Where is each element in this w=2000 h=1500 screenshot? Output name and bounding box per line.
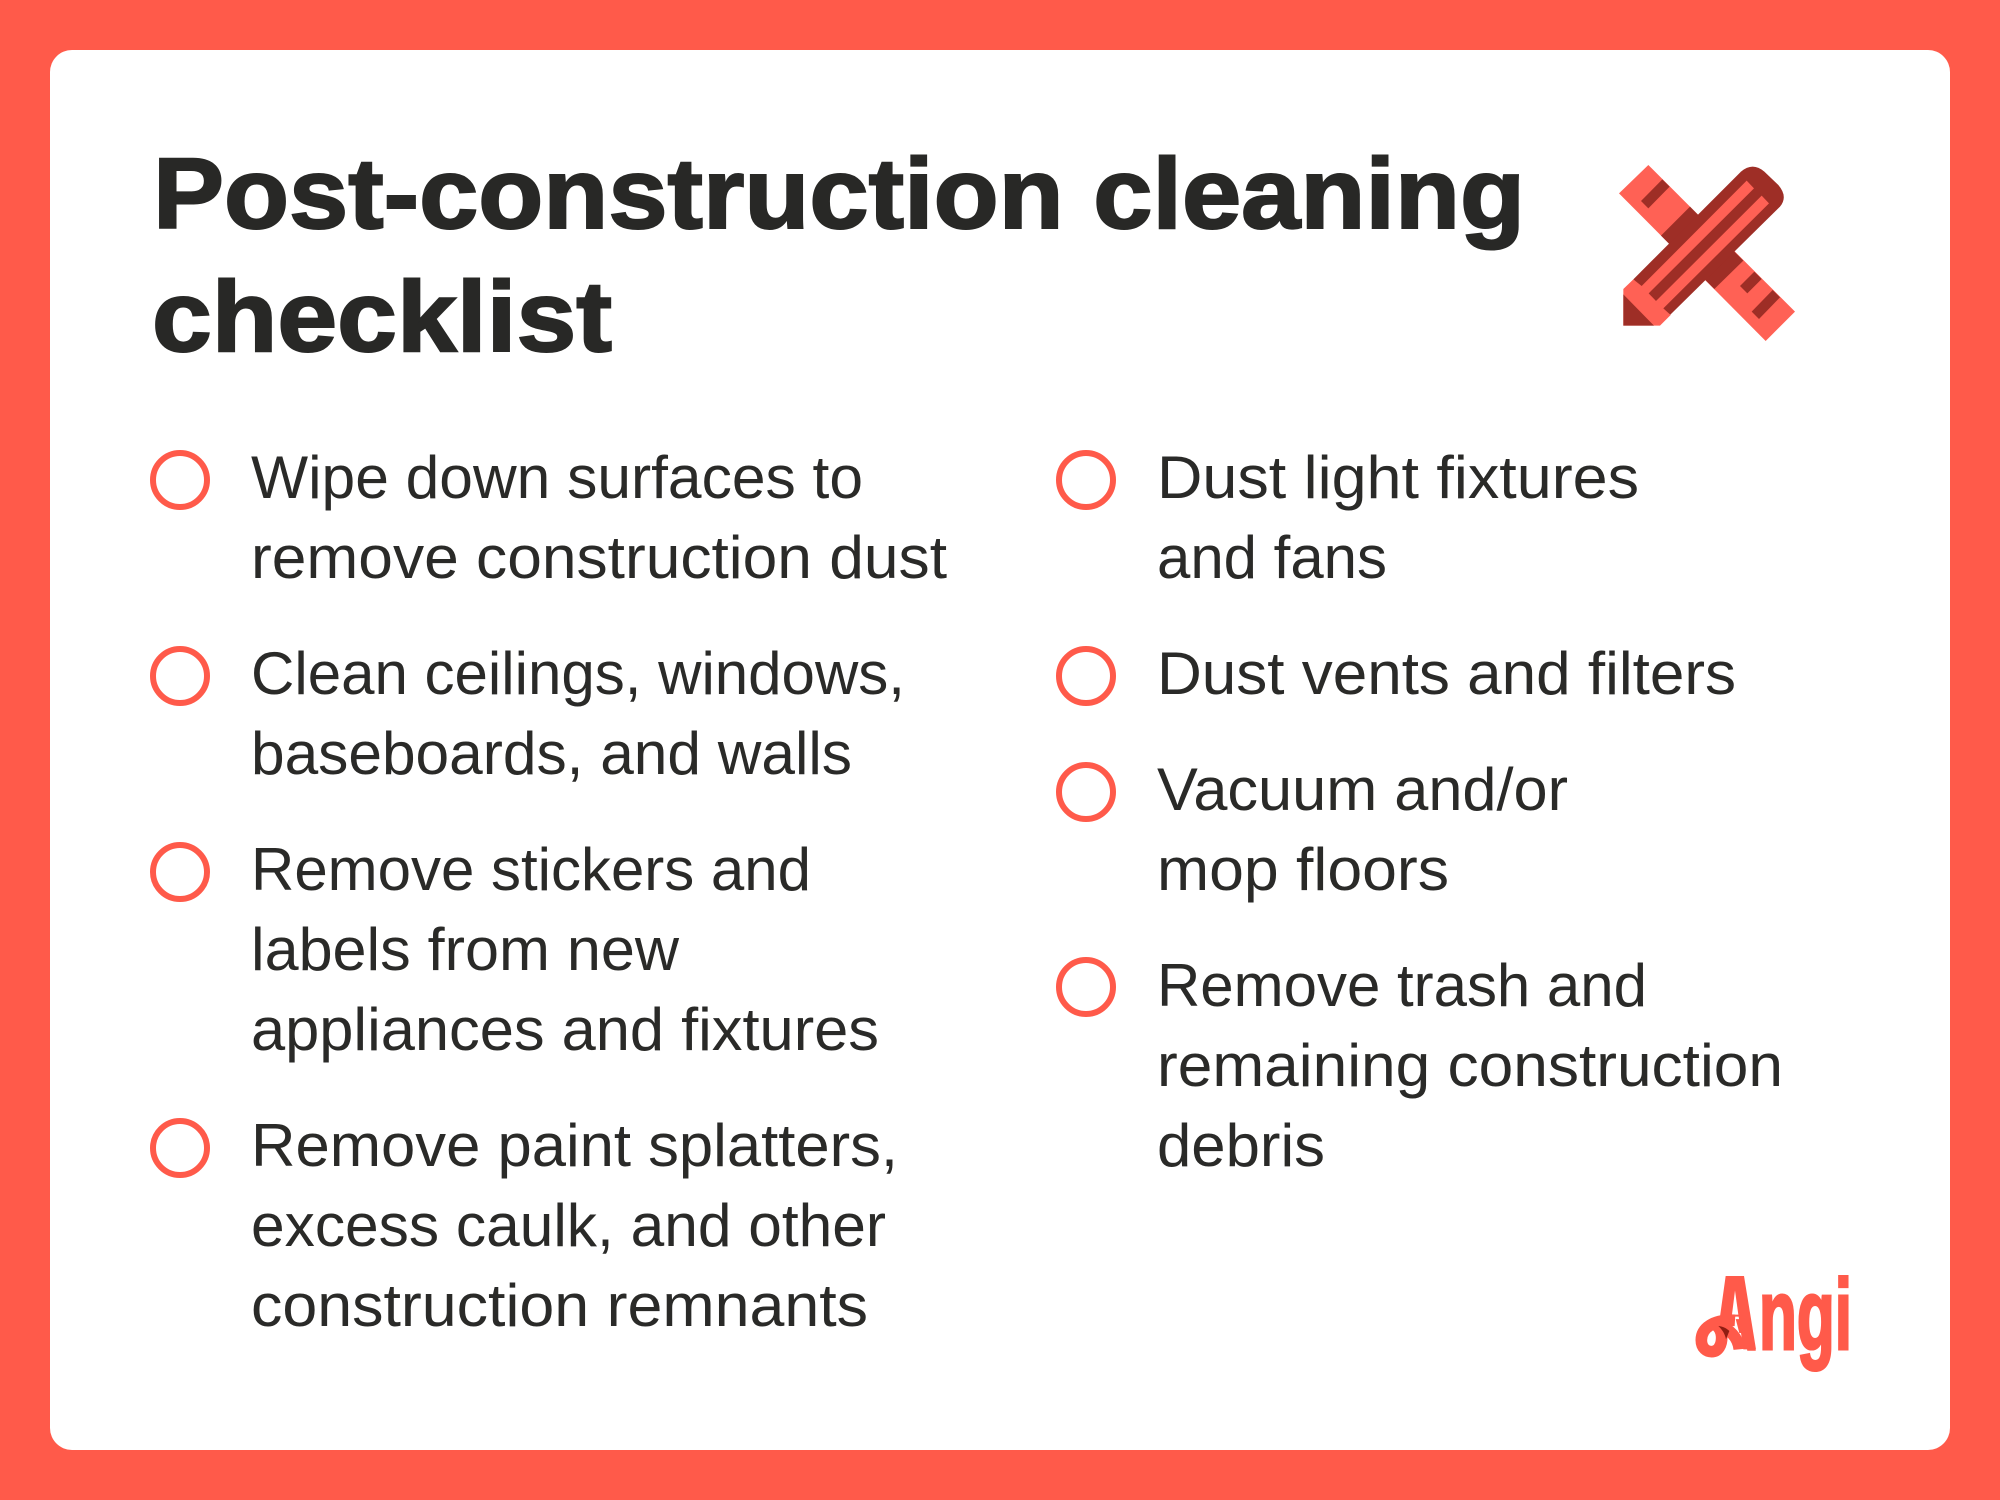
item: remove paint splatters: construction remnants (251, 1272, 868, 1339)
logo: Angi: ngi (1759, 1259, 1852, 1371)
item: clean ceilings (153, 640, 905, 787)
item: remove paint splatters (153, 1112, 898, 1339)
item: wipe down surfaces: remove construction dust (251, 524, 947, 591)
item: remove trash (1059, 952, 1783, 1179)
item: remove trash: Remove trash and (1157, 952, 1647, 1019)
item: remove stickers: appliances and fixtures (251, 996, 879, 1063)
item: remove paint splatters: Remove paint splatters, (251, 1112, 898, 1179)
item: remove trash: remaining construction (1157, 1032, 1783, 1099)
item: remove trash: debris (1157, 1112, 1325, 1179)
checklist: right column (1059, 444, 1783, 1179)
item: wipe down surfaces: Wipe down surfaces to (251, 444, 863, 511)
logo: Angi (1701, 1259, 1852, 1371)
icon: crossed pencil and ruler (1619, 165, 1795, 341)
item: vacuum and mop: Vacuum and/or (1157, 756, 1568, 823)
title: Post-construction cleaning (153, 138, 1525, 250)
item: vacuum and mop: mop floors (1157, 836, 1449, 903)
item: remove stickers: labels from new (251, 916, 680, 983)
item: dust light fixtures: Dust light fixtures (1157, 444, 1639, 511)
item: wipe down surfaces (153, 444, 947, 591)
title: checklist (152, 261, 612, 373)
item: remove paint splatters: excess caulk, and other (251, 1192, 886, 1259)
item: clean ceilings: Clean ceilings, windows, (251, 640, 905, 707)
item: dust vents: Dust vents and filters (1157, 640, 1736, 707)
logo: Angi: A (1721, 1259, 1756, 1371)
item: vacuum and mop (1059, 756, 1568, 903)
checklist: left column (153, 444, 947, 1339)
title (152, 138, 1525, 373)
item: remove stickers: Remove stickers and (251, 836, 811, 903)
item: dust light fixtures: and fans (1157, 524, 1387, 591)
item: clean ceilings: baseboards, and walls (251, 720, 852, 787)
item: dust light fixtures (1059, 444, 1639, 591)
item: remove stickers (153, 836, 879, 1063)
